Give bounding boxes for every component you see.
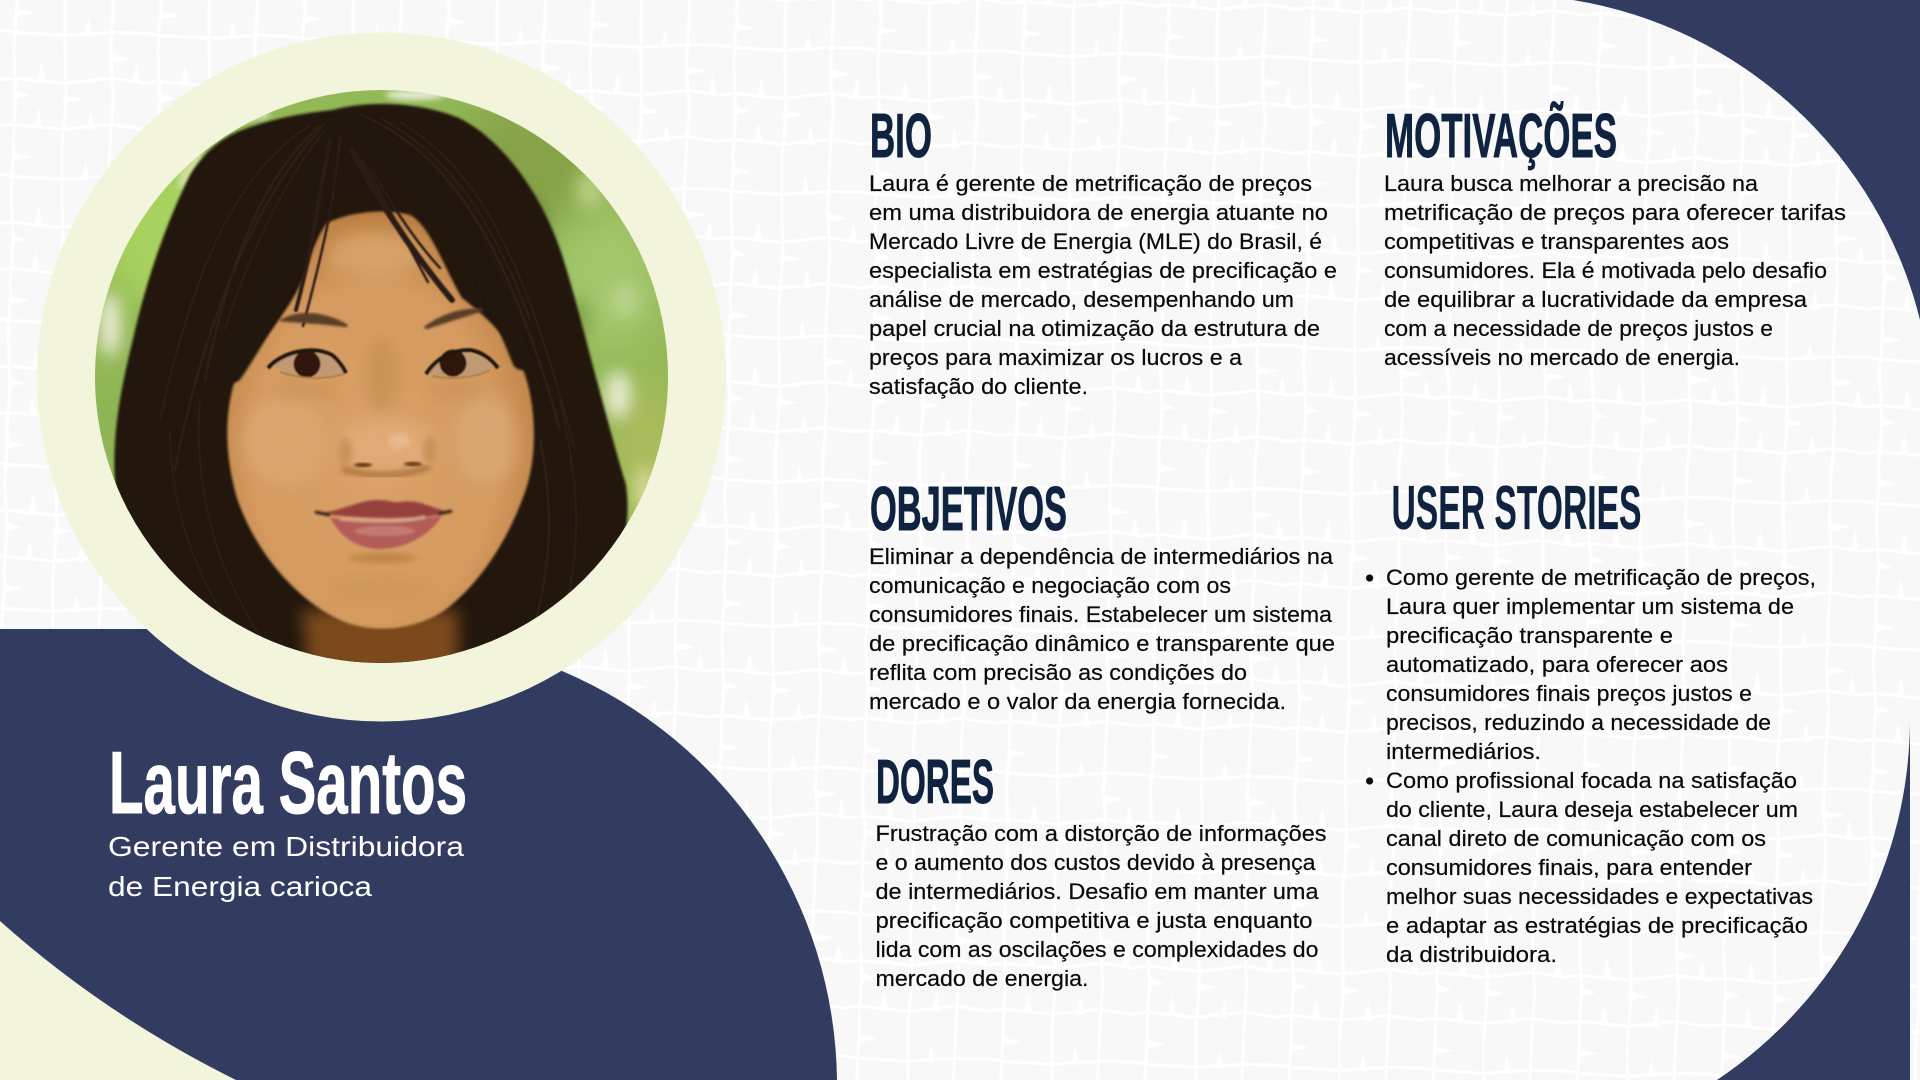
user story 1: automatizado, para oferecer aos — [1386, 652, 1728, 677]
dores text: precificação competitiva e justa enquanto — [876, 908, 1312, 933]
bio text: em uma distribuidora de energia atuante no — [869, 200, 1328, 225]
motivacoes text: competitivas e transparentes aos — [1384, 229, 1729, 254]
role subtitle — [108, 831, 465, 902]
dores text: e o aumento dos custos devido à presença — [876, 850, 1316, 875]
motivacoes text — [1384, 171, 1846, 370]
shape: navy corner bottom right — [1717, 715, 1910, 1080]
user story 1: Como gerente de metrificação de preços, — [1386, 565, 1816, 590]
motivacoes text: metrificação de preços para oferecer tarifas — [1384, 200, 1846, 225]
section: objetivos — [869, 475, 1335, 714]
dores text: Frustração com a distorção de informações — [876, 821, 1327, 846]
dores text — [876, 821, 1327, 991]
objetivos text: de precificação dinâmico e transparente que — [869, 631, 1335, 656]
role subtitle: Gerente em Distribuidora — [108, 831, 465, 862]
bangs — [232, 125, 522, 372]
heading: user stories: USER STORIES — [1392, 474, 1642, 543]
forehead strands — [296, 135, 452, 326]
heading: motivacoes: MOTIVAÇÕES — [1385, 102, 1617, 171]
user story 2: e adaptar as estratégias de precificação — [1386, 913, 1808, 938]
shape: cream corner bottom left — [0, 880, 300, 1080]
dores text: mercado de energia. — [876, 966, 1088, 991]
user story 2: da distribuidora. — [1386, 942, 1557, 967]
user story 1: consumidores finais preços justos e — [1386, 681, 1752, 706]
user story 1: precificação transparente e — [1386, 623, 1673, 648]
motivacoes text: Laura busca melhorar a precisão na — [1384, 171, 1759, 196]
bio text: satisfação do cliente. — [869, 374, 1088, 399]
bio text — [869, 171, 1337, 399]
user story 1 — [1366, 565, 1816, 764]
motivacoes text: consumidores. Ela é motivada pelo desafio — [1384, 258, 1827, 283]
user story 1: Laura quer implementar um sistema de — [1386, 594, 1794, 619]
user story 2: do cliente, Laura deseja estabelecer um — [1386, 797, 1798, 822]
profile ring — [37, 32, 726, 722]
objetivos text: reflita com precisão as condições do — [869, 660, 1247, 685]
objetivos text: comunicação e negociação com os — [869, 573, 1231, 598]
motivacoes text: com a necessidade de preços justos e — [1384, 316, 1773, 341]
bio text: especialista em estratégias de precificação e — [869, 258, 1337, 283]
panel: navy name blob — [0, 629, 837, 1080]
section: dores — [876, 748, 1327, 991]
right eyebrow — [425, 310, 482, 328]
left eyebrow — [283, 314, 347, 326]
heading: bio: BIO — [870, 102, 932, 171]
user story 2: canal direto de comunicação com os — [1386, 826, 1766, 851]
user story 2: melhor suas necessidades e expectativas — [1386, 884, 1813, 909]
objetivos text: Eliminar a dependência de intermediários na — [869, 544, 1334, 569]
dores text: lida com as oscilações e complexidades do — [876, 937, 1318, 962]
shape: navy corner top right — [1573, 0, 1920, 320]
bio text: Mercado Livre de Energia (MLE) do Brasil, é — [869, 229, 1322, 254]
section: motivacoes — [1384, 102, 1846, 370]
face — [227, 212, 534, 629]
motivacoes text: de equilibrar a lucratividade da empresa — [1384, 287, 1808, 312]
user story 2 — [1366, 768, 1813, 967]
user story 1: intermediários. — [1386, 739, 1541, 764]
neck — [292, 601, 468, 663]
user story 2: Como profissional focada na satisfação — [1386, 768, 1797, 793]
user story 2: consumidores finais, para entender — [1386, 855, 1752, 880]
dores text: de intermediários. Desafio em manter uma — [876, 879, 1319, 904]
left eye — [268, 350, 346, 378]
lips — [315, 500, 452, 563]
section: bio — [869, 102, 1337, 399]
bio text: preços para maximizar os lucros e a — [869, 345, 1243, 370]
hair back — [114, 104, 628, 700]
face shading — [245, 233, 515, 606]
motivacoes text: acessíveis no mercado de energia. — [1384, 345, 1740, 370]
bio text: análise de mercado, desempenhando um — [869, 287, 1294, 312]
heading: dores: DORES — [876, 748, 994, 817]
role subtitle: de Energia carioca — [108, 871, 373, 902]
hair sheen — [160, 115, 576, 650]
objetivos text — [869, 544, 1335, 714]
nose — [337, 420, 437, 475]
heading: objetivos: OBJETIVOS — [870, 475, 1067, 544]
objetivos text: consumidores finais. Estabelecer um sistema — [869, 602, 1333, 627]
bio text: papel crucial na otimização da estrutura de — [869, 316, 1320, 341]
user story 1: precisos, reduzindo a necessidade de — [1386, 710, 1771, 735]
name: Laura Santos: Laura Santos — [109, 733, 467, 832]
bio text: Laura é gerente de metrificação de preços — [869, 171, 1312, 196]
objetivos text: mercado e o valor da energia fornecida. — [869, 689, 1286, 714]
right eye — [426, 350, 498, 378]
section: user stories — [1366, 474, 1816, 967]
portrait photo — [95, 90, 668, 663]
